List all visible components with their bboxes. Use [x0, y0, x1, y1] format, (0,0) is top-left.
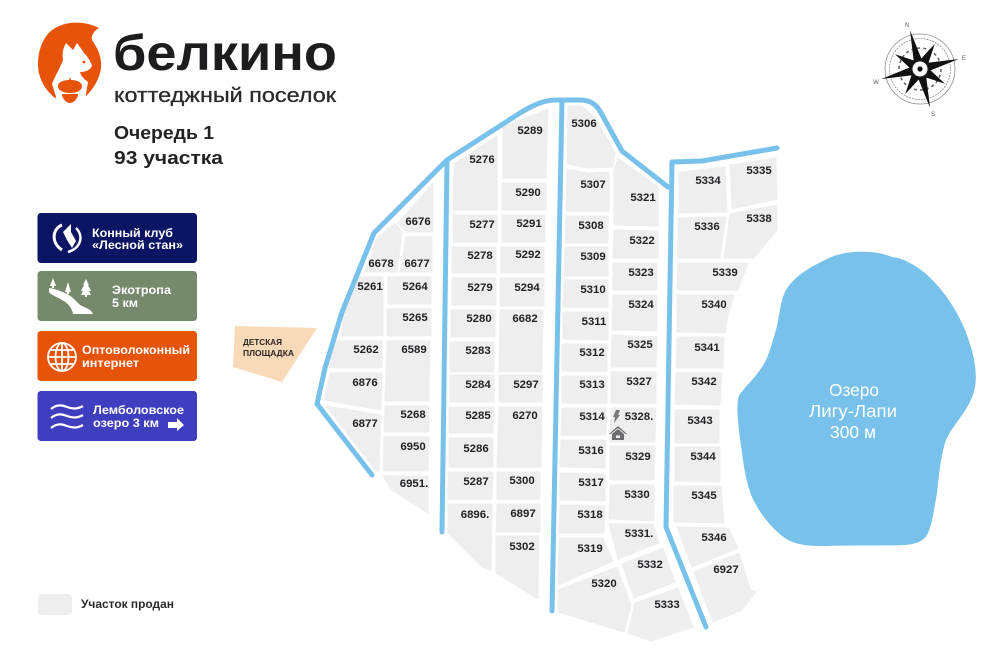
plot 5291: 5291	[516, 218, 542, 230]
plot 5262: 5262	[353, 344, 379, 356]
plot 6950	[383, 437, 429, 471]
plot 5279	[452, 278, 496, 305]
plot 6951	[383, 476, 428, 513]
plot 6677	[400, 237, 432, 272]
plot 6270: 6270	[512, 410, 538, 422]
legend: sold plot: Участок продан	[81, 599, 174, 611]
plot 5332: 5332	[637, 559, 663, 571]
badge: fiber internet	[38, 331, 197, 381]
badge: fiber internet: интернет	[82, 358, 139, 370]
plot 5283: 5283	[465, 345, 491, 357]
plot 5286: 5286	[463, 443, 489, 455]
plot 5307: 5307	[580, 179, 606, 191]
plot 6896	[448, 504, 492, 571]
plot 5319	[558, 538, 613, 585]
badge: fiber internet: Оптоволоконный	[82, 345, 190, 357]
plot 5290: 5290	[515, 187, 541, 199]
plot 5291	[502, 215, 545, 242]
icon: house	[609, 426, 627, 440]
plot 5325: 5325	[627, 339, 653, 351]
plot 5331	[609, 524, 659, 559]
plot 5331: 5331.	[625, 528, 653, 540]
plot 5280: 5280	[466, 313, 492, 325]
plot 5310	[563, 280, 608, 307]
badge: eco trail: 5 км	[112, 298, 138, 310]
plot 6897: 6897	[510, 508, 536, 520]
badge: eco trail: Экотропа	[112, 285, 172, 297]
plot 5333	[628, 588, 693, 641]
plot 6950: 6950	[400, 441, 426, 453]
plot 5340: 5340	[701, 299, 727, 311]
plot 5268	[384, 406, 429, 432]
plot 5340	[677, 295, 734, 333]
plot 5323	[613, 263, 657, 290]
plot 5316	[560, 440, 606, 468]
plot 5318	[559, 505, 605, 533]
plot 5261: 5261	[357, 281, 383, 293]
plot 5314: 5314	[579, 411, 605, 423]
plot 5346	[677, 527, 738, 567]
plot 5284: 5284	[465, 379, 491, 391]
plot 5329	[610, 446, 655, 480]
plot 5312: 5312	[579, 347, 605, 359]
plot 5324: 5324	[628, 299, 654, 311]
plot 5279: 5279	[467, 282, 493, 294]
icon: squirrel	[38, 23, 101, 103]
plot 5334	[679, 167, 727, 213]
plot 5292	[501, 247, 544, 273]
plot 5321	[614, 158, 658, 226]
badge: eco trail	[38, 271, 197, 321]
plot 5306: 5306	[571, 118, 597, 130]
plot 5302: 5302	[509, 541, 535, 553]
plot 6682	[499, 310, 543, 372]
plot 5276: 5276	[469, 154, 495, 166]
icon: compass rose	[871, 20, 969, 118]
logo wordmark: белкино	[113, 25, 337, 81]
lake: Лигу-Лапи	[809, 401, 897, 421]
plot 5323: 5323	[628, 267, 654, 279]
playground: ПЛОЩАДКА	[243, 348, 294, 358]
plot 5309: 5309	[580, 251, 606, 263]
plot 5330	[609, 485, 654, 521]
plot 5336	[678, 217, 726, 258]
plot 5327: 5327	[626, 376, 652, 388]
plot 5308: 5308	[578, 220, 604, 232]
plot 5297	[499, 375, 542, 402]
plot 5338	[724, 205, 777, 258]
plot 5309	[564, 247, 608, 276]
badge: Lembolovo lake: Лемболовское	[93, 405, 184, 417]
plot 5287	[448, 472, 493, 499]
plot 5342: 5342	[691, 376, 717, 388]
panel: plots	[324, 106, 777, 641]
plot 6589	[385, 341, 430, 401]
badge: Lembolovo lake: озеро 3 км	[93, 418, 159, 430]
plot 5284	[450, 375, 494, 402]
plot 5297: 5297	[513, 379, 539, 391]
plot 5332	[622, 548, 675, 598]
plot 5333: 5333	[654, 599, 680, 611]
plot 5343: 5343	[687, 415, 713, 427]
plot 5345	[674, 486, 724, 523]
plot 5341	[676, 337, 724, 368]
plot 5283	[450, 342, 494, 372]
icon: compass rose: S	[931, 112, 935, 118]
plot 5339	[677, 263, 748, 290]
plot 5300	[497, 472, 540, 499]
lake: Озеро	[829, 380, 879, 400]
plot 5317: 5317	[578, 477, 604, 489]
plot 5277	[453, 215, 497, 242]
plot 5302	[496, 536, 539, 599]
plot 5327	[611, 372, 656, 403]
plot 5320	[558, 567, 631, 632]
plot 5289	[503, 109, 548, 178]
logo: Belkino	[38, 23, 337, 107]
plot 6270	[497, 407, 542, 467]
icon: compass rose: E	[962, 56, 966, 62]
plot 5313	[562, 376, 607, 403]
plot 5261	[341, 277, 383, 336]
plot 5265	[387, 309, 431, 336]
plot 5278: 5278	[467, 250, 493, 262]
plot 5329: 5329	[625, 451, 651, 463]
plot 5322: 5322	[629, 235, 655, 247]
badge: horse club: Конный клуб	[92, 228, 173, 240]
plot 5328: 5328.	[625, 411, 653, 423]
plot 5286	[449, 438, 493, 467]
plot 6927	[694, 553, 756, 622]
plot 5285	[449, 407, 494, 433]
lake	[737, 252, 976, 546]
plot 5325	[611, 335, 657, 367]
plot 6877: 6877	[352, 418, 378, 430]
plot 5313: 5313	[579, 379, 605, 391]
plot 5306	[567, 106, 615, 168]
plot 5294: 5294	[514, 282, 540, 294]
plot 5262	[330, 341, 382, 368]
lake: 300 м	[830, 422, 876, 442]
plot 6676: 6676	[405, 216, 431, 228]
plot 6896: 6896.	[461, 509, 489, 521]
plot 5316: 5316	[578, 445, 604, 457]
plot 6682: 6682	[512, 313, 538, 325]
plot 5314	[561, 408, 607, 435]
plot 5321: 5321	[630, 192, 656, 204]
plot 5317	[560, 473, 605, 501]
plot 5292: 5292	[515, 249, 541, 261]
icon: lightning	[613, 410, 620, 423]
plot 5328	[610, 408, 656, 442]
legend: sold plot	[38, 594, 174, 615]
plot 5311: 5311	[582, 316, 607, 328]
plot 6897	[496, 504, 540, 532]
plot 5268: 5268	[400, 409, 426, 421]
playground: ДЕТСКАЯ	[243, 337, 282, 347]
plot 5290	[502, 183, 546, 210]
plot 5289: 5289	[517, 125, 543, 137]
plot 6877	[326, 406, 381, 471]
plot 6589: 6589	[401, 344, 427, 356]
badge: horse club: «Лесной стан»	[92, 240, 183, 252]
plot 5276	[453, 136, 497, 210]
plot 6677: 6677	[404, 258, 430, 270]
plot 5319: 5319	[577, 543, 603, 555]
plot 6876: 6876	[352, 377, 378, 389]
plot 5264: 5264	[402, 281, 428, 293]
plot 5287: 5287	[463, 476, 489, 488]
plot 5343	[675, 410, 719, 443]
plot 5294	[500, 278, 544, 306]
icon: compass rose: N	[905, 23, 909, 29]
icon: compass rose: W	[873, 80, 879, 86]
plot 5307	[566, 169, 609, 211]
plot 6678	[365, 223, 402, 272]
plot 5310: 5310	[580, 284, 606, 296]
plot 5311	[563, 312, 608, 340]
plot 6927: 6927	[713, 564, 739, 576]
plot 5335: 5335	[746, 165, 772, 177]
plot 5324	[612, 295, 657, 331]
badge: Lembolovo lake	[38, 391, 197, 441]
plot 5336: 5336	[694, 221, 720, 233]
plot 5341: 5341	[694, 342, 720, 354]
plot 5330: 5330	[624, 489, 650, 501]
plot 5308	[565, 216, 608, 243]
plot 5322	[613, 230, 658, 258]
plot 5312	[562, 344, 607, 371]
plot 5278	[452, 247, 496, 273]
plot 5344: 5344	[690, 451, 716, 463]
arrow	[168, 418, 184, 431]
plot 5342	[675, 373, 722, 405]
plot 5318: 5318	[577, 509, 603, 521]
heading: phase: Очередь 1	[114, 123, 214, 143]
plot 5338: 5338	[746, 213, 772, 225]
roads	[317, 100, 777, 627]
plot 5300: 5300	[509, 475, 535, 487]
plot 5334: 5334	[695, 175, 721, 187]
plot 5280	[451, 310, 495, 337]
plot 5345: 5345	[691, 490, 717, 502]
plot 5346: 5346	[701, 532, 727, 544]
plot 6876	[324, 373, 382, 410]
badge: horse club	[38, 213, 197, 263]
plot 5285: 5285	[465, 410, 491, 422]
plot 5320: 5320	[591, 578, 617, 590]
playground	[233, 326, 317, 382]
plot 5277: 5277	[469, 219, 495, 231]
logo subtitle: коттеджный поселок	[114, 85, 336, 107]
plot 5265: 5265	[402, 312, 428, 324]
plot 6678: 6678	[368, 258, 394, 270]
plot 6676	[398, 183, 433, 232]
plot 5335	[730, 158, 777, 209]
heading: phase: 93 участка	[114, 148, 224, 168]
heading: phase	[114, 123, 224, 168]
plot 6951: 6951.	[400, 478, 428, 490]
plot 5339: 5339	[712, 267, 738, 279]
plot 5264	[388, 277, 431, 304]
plot 5344	[675, 447, 720, 482]
